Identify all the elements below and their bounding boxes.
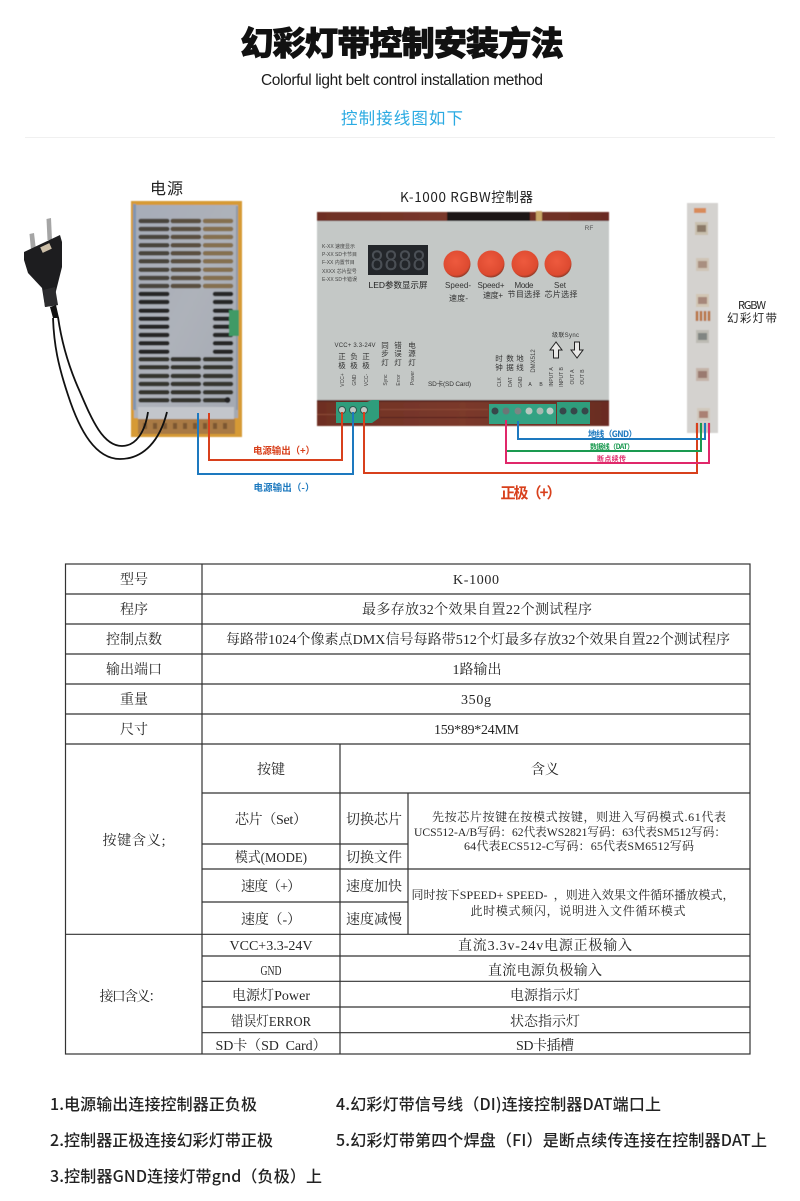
wire labels: 断点续传 (597, 454, 626, 464)
terminal legend: 数 (506, 353, 514, 363)
terminal legend: 灯 (394, 357, 402, 367)
button meanings: 同时按下SPEED+ SPEED- ，则进入效果文件循环播放模式， (412, 887, 734, 902)
spec rows: 重量 (120, 692, 148, 708)
wire labels: 地线（GND） (588, 428, 637, 440)
interface meanings: 接口含义： (100, 988, 162, 1005)
terminal legend: GND (352, 374, 358, 386)
table grid (66, 564, 750, 1054)
installation notes: 5.幻彩灯带第四个焊盘（FI）是断点续传连接在控制器DAT上 (336, 1127, 767, 1151)
button labels: Speed- (445, 281, 471, 290)
spec table (66, 564, 750, 1054)
wire labels: 正极（+） (500, 482, 562, 503)
button labels: Set (554, 281, 567, 290)
installation notes: 3.控制器GND连接灯带gnd（负极）上 (50, 1163, 322, 1187)
spec rows: 350g (461, 693, 491, 708)
button meanings: 切换芯片 (346, 811, 402, 828)
right terminal blocks (489, 402, 590, 424)
power supply unit (131, 201, 242, 437)
button meanings: 此时模式频闪，说明进入文件循环模式 (470, 903, 686, 918)
button labels: 芯片选择 (544, 289, 578, 299)
buttons (444, 250, 572, 278)
controller device: RF (585, 225, 593, 232)
terminal legend: VCC+ (340, 373, 346, 387)
button meanings: 按键 (257, 761, 285, 778)
interface meanings: 直流电源负极输入 (488, 962, 602, 979)
terminal legend: DMX512 (531, 349, 537, 373)
terminal legend: 源 (408, 349, 416, 358)
terminal legend: 正 (338, 352, 346, 361)
terminal legend: 步 (381, 349, 389, 358)
terminal legend: INPUT B (559, 367, 565, 387)
terminal legend: 钟 (495, 362, 503, 372)
wire: breakpoint resume (506, 420, 709, 463)
button meanings: 先按芯片按键在按模式按键，则进入写码模式.61代表 (432, 809, 726, 824)
status codes: K-XX 速度显示 (322, 243, 355, 250)
terminal legend: Power (410, 371, 416, 385)
terminal legend: VCC+ 3.3-24V (334, 343, 376, 349)
button meanings: 速度（-） (241, 911, 301, 928)
interface meanings: SD卡（SD Card） (216, 1037, 326, 1054)
terminal legend: 线 (516, 362, 524, 372)
title: 幻彩灯带控制安装方法 (240, 17, 564, 65)
wire labels (253, 428, 637, 503)
terminal legend: 负 (350, 351, 358, 361)
terminal legend: 极 (338, 360, 346, 370)
button meanings: 64代表ECS512-C写码：65代表SM6512写码 (464, 839, 694, 853)
status codes: XXXX 芯片型号 (322, 268, 357, 275)
status codes: E-XX SD卡错误 (322, 276, 357, 283)
button labels: Speed+ (478, 281, 505, 290)
installation notes (50, 1091, 767, 1187)
terminal legend (334, 331, 586, 388)
wire: power output negative (198, 412, 353, 474)
display caption: LED参数显示屏 (368, 280, 428, 290)
interface meanings: 电源灯Power (232, 987, 310, 1004)
wire: power output positive (209, 412, 342, 460)
interface meanings: 错误灯ERROR (231, 1014, 312, 1030)
status codes: F-XX 内置节目 (322, 259, 355, 266)
installation notes: 1.电源输出连接控制器正负极 (50, 1091, 257, 1115)
button labels: 速度+ (483, 290, 503, 300)
terminal legend: OUT B (580, 369, 586, 385)
LED display: 8888 (370, 246, 426, 280)
left terminal block (336, 400, 379, 423)
spec rows: K-1000 (453, 573, 499, 588)
spec rows: 程序 (120, 602, 148, 618)
terminal legend: Sync (383, 374, 389, 386)
spec rows: 1路输出 (452, 662, 502, 678)
button meanings: 芯片（Set） (235, 811, 307, 828)
button meanings: 速度（+） (241, 878, 301, 895)
button labels (445, 281, 578, 303)
strip label: 幻彩灯带 (727, 310, 777, 326)
interface meanings: 状态指示灯 (510, 1013, 580, 1030)
terminal legend: 极 (362, 360, 370, 370)
button meanings: 模式(MODE) (235, 849, 307, 866)
terminal legend: Error (396, 374, 402, 386)
spec rows: 每路带1024个像素点DMX信号每路带512个灯最多存放32个效果自置22个测试程序 (226, 631, 730, 648)
installation notes: 4.幻彩灯带信号线（DI)连接控制器DAT端口上 (336, 1091, 661, 1115)
terminal legend: OUT A (570, 369, 576, 384)
interface meanings: SD卡插槽 (516, 1037, 574, 1054)
wire: data (507, 423, 701, 451)
spec rows: 尺寸 (120, 721, 148, 738)
interface meanings: VCC+3.3-24V (230, 939, 312, 954)
button labels: Mode (514, 281, 534, 290)
button meanings: UCS512-A/B写码：62代表WS2821写码：63代表SM512写码： (414, 825, 726, 839)
terminal legend: 正 (362, 352, 370, 361)
spec rows: 159*89*24MM (434, 723, 520, 738)
spec rows: 型号 (120, 571, 148, 588)
wire labels: 数据线（DAT） (590, 442, 634, 452)
button meanings: 速度加快 (346, 878, 402, 895)
button labels: 速度- (449, 293, 468, 303)
terminal legend: SD卡(SD Card) (428, 379, 471, 388)
terminal legend: 时 (495, 353, 503, 363)
interface meanings (100, 937, 632, 1054)
terminal legend: 灯 (408, 357, 416, 367)
spec rows (106, 571, 730, 738)
wire labels: 电源输出（+） (253, 443, 315, 457)
terminal legend: 据 (506, 363, 514, 372)
terminal legend: GND (518, 376, 524, 388)
interface meanings: GND (260, 964, 282, 979)
terminal legend: 误 (394, 349, 402, 358)
icon: sync arrows (550, 342, 583, 358)
controller device (317, 211, 609, 426)
subtitle: Colorful light belt control installation method (261, 72, 543, 89)
button meanings: 含义 (531, 762, 559, 778)
section heading: 控制接线图如下 (341, 105, 463, 129)
button labels: 节目选择 (508, 289, 540, 299)
installation notes: 2.控制器正极连接幻彩灯带正极 (50, 1127, 273, 1151)
wire: positive to strip (364, 412, 697, 473)
LED strip (687, 203, 777, 433)
status codes (322, 243, 357, 283)
wires (198, 412, 709, 474)
spec rows: 控制点数 (106, 631, 162, 648)
spec rows: 最多存放32个效果自置22个测试程序 (362, 602, 592, 618)
status codes: P-XX SD卡节目 (322, 251, 357, 258)
spec rows: 输出端口 (106, 661, 162, 678)
terminal legend: 极 (350, 360, 358, 370)
terminal legend: CLK (497, 376, 503, 387)
terminal legend: 灯 (381, 357, 389, 367)
power supply label: 电源 (150, 175, 183, 199)
panel: wiring diagram (24, 175, 777, 503)
wire: ground (518, 421, 705, 439)
terminal legend: VCC- (364, 374, 370, 386)
button meanings: 速度减慢 (346, 911, 402, 928)
terminal legend: 错 (394, 340, 402, 350)
wire labels: 电源输出（-） (254, 480, 314, 494)
icon: power plug and cord (24, 218, 167, 459)
terminal legend: 同 (381, 341, 389, 350)
terminal legend: DAT (508, 377, 514, 387)
button meanings: 按键含义; (102, 832, 166, 849)
terminal legend: 级联Sync (552, 331, 579, 339)
terminal legend: 地 (516, 353, 524, 363)
controller label: K-1000 RGBW控制器 (400, 186, 534, 206)
terminal legend: 电 (408, 340, 416, 350)
strip label: RGBW (738, 297, 766, 313)
terminal legend: A (528, 382, 532, 388)
interface meanings: 直流3.3v-24v电源正极输入 (458, 937, 632, 954)
terminal legend: B (539, 382, 543, 388)
strip label (727, 297, 777, 326)
terminal legend: INPUT A (549, 367, 555, 387)
button meanings (102, 761, 734, 928)
interface meanings: 电源指示灯 (510, 987, 580, 1004)
button meanings: 切换文件 (346, 849, 402, 866)
